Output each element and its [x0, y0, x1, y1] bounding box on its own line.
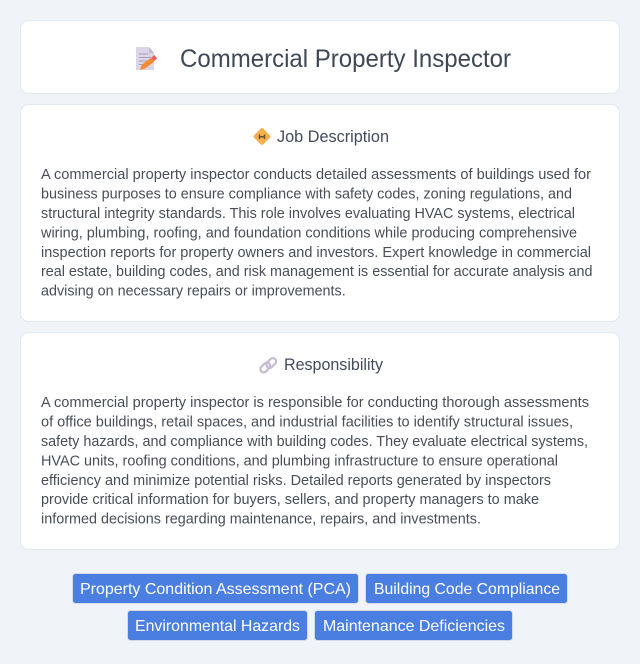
text block: job description: inspection reports for property owners and investors. Expert knowledge in commercial — [41, 245, 591, 261]
text block: responsibility: A commercial property inspector is responsible for conducting thorough assessments — [41, 395, 589, 411]
tag: building code compliance — [366, 574, 568, 604]
text block: job description: advising on necessary repairs or improvements. — [41, 284, 346, 300]
text block: responsibility: safety hazards, and compliance with building codes. They evaluate electrical systems, — [41, 434, 588, 450]
panel: title card — [20, 20, 620, 94]
tag: environmental hazards: Environmental Hazards — [135, 618, 300, 635]
text block: job description: wiring, plumbing, roofing, and foundation conditions while producing comprehensive — [40, 225, 577, 241]
tag: maintenance deficiencies — [314, 610, 512, 640]
tag: building code compliance: Building Code Compliance — [374, 581, 560, 598]
text block: job description — [40, 167, 592, 300]
icon: link — [259, 357, 277, 374]
tag: maintenance deficiencies: Maintenance Deficiencies — [323, 618, 505, 635]
text block: responsibility: HVAC units, roofing conditions, and plumbing infrastructure to ensure operational — [41, 453, 558, 469]
tag: property condition assessment: Property Condition Assessment (PCA) — [80, 581, 351, 598]
text block: job description: real estate, building codes, and risk management is essential for accurate analysis and — [41, 264, 592, 280]
title: Commercial Property Inspector — [180, 45, 511, 73]
text block: responsibility: provide critical information for buyers, sellers, and property managers to make — [41, 492, 539, 508]
tag: property condition assessment — [72, 574, 358, 604]
text block: job description: business purposes to ensure compliance with safety codes, zoning regulations, and — [41, 186, 572, 202]
icon: diamond sign — [253, 127, 271, 146]
tags — [72, 574, 568, 640]
tag: environmental hazards — [128, 610, 308, 640]
heading: job description: Job Description — [277, 128, 389, 146]
icon: document with pencil — [136, 47, 157, 70]
text block: responsibility — [41, 395, 589, 528]
panel: responsibility — [20, 332, 620, 550]
text block: responsibility: informed decisions regarding maintenance, repairs, and investments. — [41, 512, 481, 528]
text block: job description: A commercial property inspector conducts detailed assessments of buildings used for — [41, 167, 591, 183]
panel: job description — [20, 104, 620, 322]
text block: responsibility: of office buildings, retail spaces, and industrial facilities to identify structural issues, — [41, 414, 573, 430]
heading: responsibility: Responsibility — [284, 356, 384, 374]
text block: responsibility: efficiency and minimize potential risks. Detailed reports generated by inspectors — [41, 473, 551, 489]
text block: job description: structural integrity standards. This role involves evaluating HVAC systems, electrical — [41, 206, 575, 222]
